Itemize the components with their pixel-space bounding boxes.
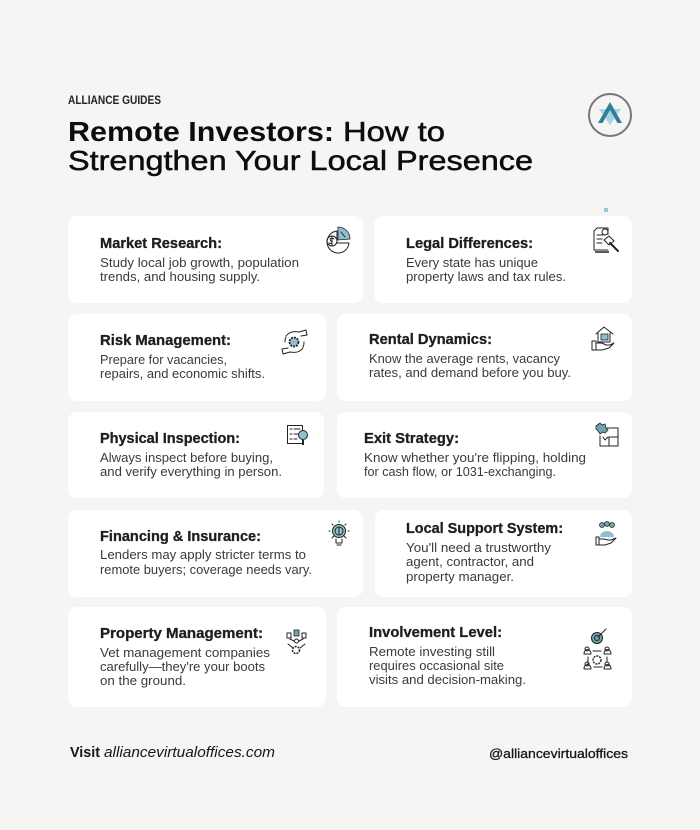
card: Financing & Insurance: Lenders may apply stricter terms to xyxy=(100,548,306,562)
icon: lightbulb with dollar xyxy=(329,521,349,545)
card: Legal Differences xyxy=(374,216,632,303)
footer: website: Visit xyxy=(70,745,100,761)
title: Strengthen Your Local Presence xyxy=(68,145,533,176)
card: Property Management: carefully—they're your boots xyxy=(100,660,265,674)
icon: hand holding people xyxy=(596,522,616,545)
decorative dot marker xyxy=(604,208,608,212)
card: Legal Differences: property laws and tax rules. xyxy=(406,270,566,284)
card: Local Support System: property manager. xyxy=(406,570,514,584)
card: Exit Strategy: Exit Strategy: xyxy=(364,431,459,447)
footer: website: alliancevirtualoffices.com xyxy=(104,745,275,761)
card: Local Support System: Local Support System: xyxy=(406,521,563,537)
icon: hands and gear xyxy=(282,330,307,354)
title: Remote Investors: xyxy=(68,116,334,147)
logo xyxy=(589,94,631,136)
card: Physical Inspection: Always inspect before buying, xyxy=(100,451,273,465)
card: Market Research: Market Research: xyxy=(100,236,222,252)
card: Property Management: Property Management: xyxy=(100,626,263,642)
card: Rental Dynamics xyxy=(337,314,632,401)
icon: checklists and gear xyxy=(287,630,306,654)
card: Property Management: Vet management companies xyxy=(100,646,270,660)
card: Financing & Insurance: remote buyers; coverage needs vary. xyxy=(100,563,312,577)
card: Financing & Insurance xyxy=(68,510,363,597)
card: Risk Management: Risk Management: xyxy=(100,333,231,349)
card: Legal Differences: Legal Differences: xyxy=(406,236,533,252)
card: Rental Dynamics: Rental Dynamics: xyxy=(369,332,492,348)
card: Involvement Level: requires occasional site xyxy=(369,659,504,673)
card: Market Research xyxy=(68,216,363,303)
icon: pie chart with dollar xyxy=(327,227,350,253)
title: How to xyxy=(343,116,445,147)
card: Involvement Level: Remote investing still xyxy=(369,645,495,659)
card: Involvement Level xyxy=(337,607,632,707)
card: Property Management xyxy=(68,607,326,707)
card: Involvement Level: Involvement Level: xyxy=(369,625,502,641)
card: Physical Inspection: Physical Inspection: xyxy=(100,431,240,447)
card: Local Support System xyxy=(375,510,632,597)
icon: target, people and gear xyxy=(584,629,611,669)
card: Exit Strategy: for cash flow, or 1031-exchanging. xyxy=(364,465,556,479)
card: Involvement Level: visits and decision-making. xyxy=(369,673,526,687)
card: Market Research: Study local job growth, population xyxy=(100,256,299,270)
card: Local Support System: You'll need a trustworthy xyxy=(406,541,552,555)
card: Financing & Insurance: Financing & Insurance: xyxy=(100,529,261,545)
card: Risk Management: repairs, and economic shifts. xyxy=(100,367,265,381)
card: Rental Dynamics: rates, and demand before you buy. xyxy=(369,366,571,380)
card: Property Management: on the ground. xyxy=(100,674,186,688)
card: Legal Differences: Every state has unique xyxy=(406,256,538,270)
card: Rental Dynamics: Know the average rents, vacancy xyxy=(369,352,561,366)
icon: hand holding house xyxy=(592,327,614,350)
card: Risk Management xyxy=(68,314,326,401)
icon: checklist and magnifier xyxy=(288,426,308,445)
title xyxy=(68,116,533,176)
card: Physical Inspection: and verify everything in person. xyxy=(100,465,282,479)
card: Market Research: trends, and housing supply. xyxy=(100,270,260,284)
icon: document and gavel xyxy=(594,228,618,252)
eyebrow: Alliance Guides: ALLIANCE GUIDES xyxy=(68,95,161,107)
card: Local Support System: agent, contractor, and xyxy=(406,555,534,569)
card: Exit Strategy xyxy=(337,412,632,498)
card: Risk Management: Prepare for vacancies, xyxy=(100,353,227,367)
icon: puzzle pieces xyxy=(596,423,618,446)
card: Exit Strategy: Know whether you're flipping, holding xyxy=(364,451,586,465)
footer: social handle: @alliancevirtualoffices xyxy=(489,746,629,761)
card: Physical Inspection xyxy=(68,412,324,498)
